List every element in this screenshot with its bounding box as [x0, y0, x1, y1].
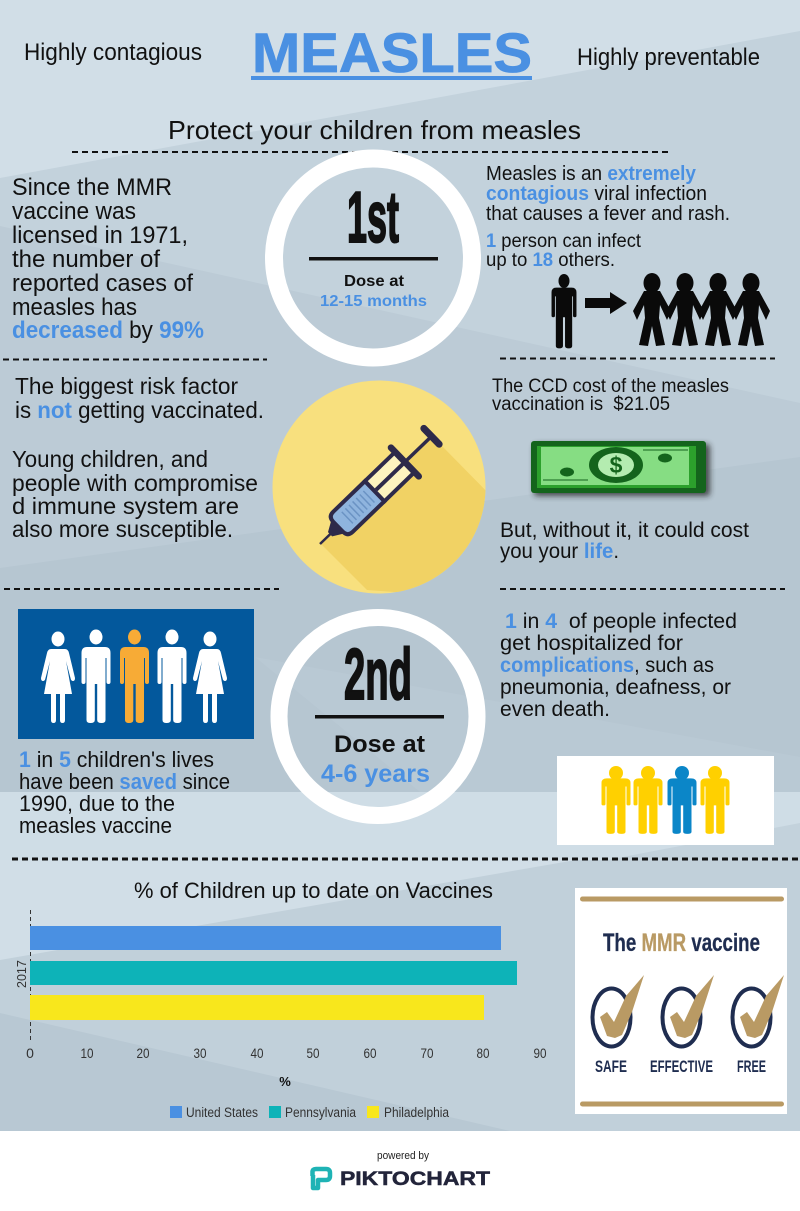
- x axis ticks: 40: [250, 1045, 264, 1061]
- x axis ticks: 70: [420, 1045, 434, 1061]
- x axis ticks: [26, 1045, 547, 1061]
- text block: hospitalization: [500, 609, 737, 721]
- badge title: The MMR vaccine: [603, 929, 760, 957]
- text block: MMR vaccine history: Since the MMR: [12, 174, 172, 201]
- dashed dividers: [3, 152, 800, 859]
- text block: risk factor: also more susceptible.: [12, 516, 233, 542]
- x axis ticks: 60: [364, 1045, 377, 1061]
- icon: woman: [41, 632, 75, 723]
- x axis ticks: 50: [306, 1045, 320, 1061]
- text block: hospitalization: even death.: [500, 697, 610, 721]
- icon: syringe in yellow circle: [272, 380, 500, 600]
- text block: hospitalization: complications, such as: [500, 653, 714, 677]
- text block: contagion: Measles is an extremely: [486, 163, 697, 185]
- first dose ring: 1st: [347, 178, 399, 258]
- icon: check effective: [662, 975, 714, 1046]
- chart title: % of Children up to date on Vaccines: [134, 878, 493, 903]
- panel: MMR vaccine badge: [575, 888, 787, 1114]
- text block: contagion: contagious viral infection: [486, 183, 707, 205]
- text block: risk factor: d immune system are: [12, 493, 239, 519]
- bar chart: [15, 878, 547, 1120]
- text block: contagion: up to 18 others.: [486, 250, 615, 271]
- second dose number: 2nd: [344, 635, 412, 715]
- icon: piktochart mark: [312, 1169, 330, 1188]
- powered by: powered by: [377, 1150, 429, 1162]
- text block: vaccination cost: [492, 376, 729, 415]
- icon: yellow person: [700, 766, 730, 834]
- icon: dollar bill: [531, 441, 710, 496]
- legend: [170, 1105, 449, 1120]
- panel: blue people panel: [18, 609, 254, 739]
- piktochart wordmark: PIKTOCHART: [340, 1168, 490, 1190]
- text block: cost of life: [500, 519, 749, 563]
- legend: Pennsylvania: [285, 1105, 356, 1120]
- bar: Pennsylvania: [30, 961, 517, 985]
- text block: lives saved: 1990, due to the: [19, 791, 175, 816]
- text block: lives saved: measles vaccine: [19, 813, 172, 838]
- badge labels: FREE: [737, 1058, 766, 1076]
- text block: MMR vaccine history: measles has: [12, 294, 137, 321]
- legend: United States: [186, 1105, 258, 1120]
- icon: woman: [193, 632, 227, 723]
- text block: MMR vaccine history: licensed in 1971,: [12, 222, 188, 249]
- icon: highlighted man: [120, 630, 149, 723]
- badge labels: [595, 1058, 766, 1076]
- icon: single person: [552, 274, 576, 348]
- second dose ring: [279, 618, 477, 816]
- badge labels: SAFE: [595, 1058, 627, 1076]
- text block: MMR vaccine history: the number of: [12, 246, 160, 273]
- text block: hospitalization: get hospitalized for: [500, 631, 683, 655]
- text block: contagion: 1 person can infect: [486, 231, 642, 252]
- icon: paper doll chain: [633, 273, 770, 346]
- text block: hospitalization: 1 in 4 of people infected: [505, 609, 737, 633]
- text block: risk factor: The biggest risk factor: [15, 373, 238, 399]
- x axis ticks: 80: [476, 1045, 490, 1061]
- text block: lives saved: [19, 747, 230, 838]
- icon: one person infects many: [552, 273, 770, 348]
- title: MEASLES: [252, 21, 532, 84]
- icon: blue person: [668, 766, 696, 834]
- y axis label: 2017: [15, 960, 29, 988]
- icon: yellow person: [602, 766, 630, 834]
- text block: hospitalization: pneumonia, deafness, or: [500, 675, 731, 699]
- text block: cost of life: But, without it, it could cost: [500, 519, 749, 542]
- x axis ticks: 90: [534, 1045, 547, 1061]
- x axis ticks: 20: [136, 1045, 150, 1061]
- icon: check free: [732, 975, 784, 1046]
- icon: man: [158, 630, 186, 723]
- text block: MMR vaccine history: [12, 174, 204, 344]
- icon: arrow: [585, 292, 627, 314]
- second dose label: Dose at: [334, 731, 425, 758]
- text block: lives saved: have been saved since: [19, 769, 230, 794]
- text block: contagion: [486, 163, 730, 271]
- icon: dollar sign: $: [610, 452, 623, 478]
- panel: four people: [557, 756, 774, 845]
- badge labels: EFFECTIVE: [650, 1058, 713, 1076]
- footer background: [0, 1131, 800, 1211]
- text block: lives saved: 1 in 5 children's lives: [19, 747, 214, 772]
- text block: MMR vaccine history: vaccine was: [12, 198, 136, 225]
- footer logo: [312, 1150, 490, 1190]
- text block: risk factor: people with compromise: [12, 470, 258, 496]
- text block: MMR vaccine history: decreased by 99%: [12, 317, 204, 344]
- x axis ticks: 10: [80, 1045, 94, 1061]
- x axis ticks: 30: [194, 1045, 207, 1061]
- legend: Philadelphia: [384, 1105, 449, 1120]
- first dose label: Dose at: [344, 273, 405, 290]
- x axis ticks: 0: [26, 1045, 34, 1061]
- second dose age: 4-6 years: [321, 760, 430, 788]
- text block: contagion: that causes a fever and rash.: [486, 203, 730, 225]
- text block: vaccination cost: vaccination is $21.05: [492, 394, 670, 415]
- text block: risk factor: [12, 373, 264, 542]
- icon: check safe: [592, 975, 644, 1046]
- icon: man: [82, 630, 110, 723]
- icon: yellow person: [634, 766, 662, 834]
- bar: United States: [30, 926, 501, 950]
- bar: Philadelphia: [30, 995, 484, 1020]
- first dose age: 12-15 months: [320, 293, 427, 310]
- text block: vaccination cost: The CCD cost of the measles: [492, 376, 729, 397]
- subtitle: Protect your children from measles: [168, 115, 581, 145]
- text block: risk factor: is not getting vaccinated.: [15, 397, 264, 423]
- text block: risk factor: Young children, and: [12, 446, 208, 472]
- tagline: highly contagious: Highly contagious: [24, 39, 202, 66]
- text block: MMR vaccine history: reported cases of: [12, 270, 193, 297]
- x axis label: %: [279, 1074, 291, 1089]
- tagline: highly preventable: Highly preventable: [577, 44, 760, 71]
- text block: cost of life: you your life.: [500, 540, 619, 563]
- first dose ring: [274, 158, 472, 358]
